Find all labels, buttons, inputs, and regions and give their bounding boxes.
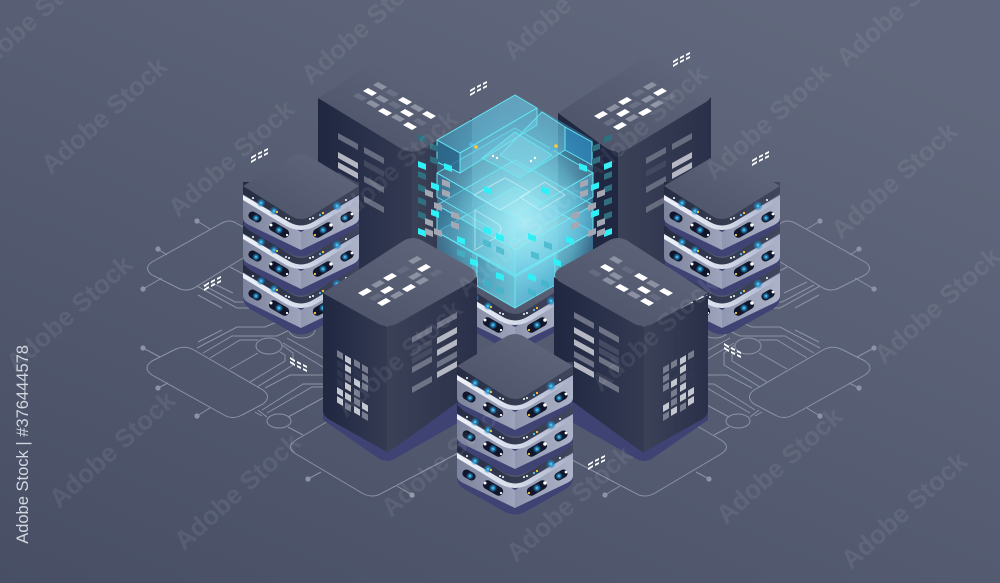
stock watermark pattern: Adobe Stock xyxy=(35,51,173,180)
stock watermark pattern: Adobe Stock xyxy=(162,94,300,223)
tower floor shadow xyxy=(323,385,477,461)
stock watermark pattern: Adobe Stock xyxy=(450,174,588,303)
front-right server tower xyxy=(554,238,708,461)
front server stack xyxy=(457,334,573,514)
small data tags xyxy=(204,52,769,470)
stock watermark pattern: Adobe Stock xyxy=(835,446,973,575)
circuit board lines: left xyxy=(140,218,460,498)
stock watermark pattern: Adobe Stock xyxy=(43,385,181,514)
stock watermark pattern: Adobe Stock xyxy=(330,294,468,423)
stock watermark pattern: Adobe Stock xyxy=(698,57,836,186)
tower floor shadow xyxy=(554,385,708,461)
cube: lower plate xyxy=(437,187,593,277)
cube: amber and white nodes xyxy=(469,142,558,162)
cube: translucent body xyxy=(437,95,593,308)
holographic data cube xyxy=(437,95,595,308)
center back server stack xyxy=(457,249,573,352)
stock watermark pattern: Adobe Stock xyxy=(575,59,713,188)
stock watermark pattern: Adobe Stock xyxy=(585,269,723,398)
right server stack xyxy=(664,154,780,334)
stock watermark pattern: Adobe Stock xyxy=(0,249,138,378)
cube: bright squares xyxy=(444,163,587,282)
cube: top box xyxy=(437,95,592,178)
cube: soft squares xyxy=(457,239,552,297)
pixel squares on tower sides: right xyxy=(571,134,612,237)
cube: second layer xyxy=(437,128,593,242)
cube: bottom block xyxy=(477,252,555,308)
stock watermark pattern: Adobe Stock xyxy=(168,427,306,556)
stock watermark pattern: Adobe Stock xyxy=(825,116,963,245)
cube: central glow xyxy=(455,152,595,292)
stock watermark pattern: Adobe Stock xyxy=(500,439,638,568)
stock watermark pattern: Adobe Stock xyxy=(325,104,463,233)
stock watermark pattern: Adobe Stock xyxy=(710,401,848,530)
back-right server tower xyxy=(558,57,711,340)
front-left server tower xyxy=(323,238,477,461)
cube: third layer xyxy=(437,160,593,275)
pixel squares on tower sides: left xyxy=(418,134,459,237)
left server stack xyxy=(243,154,359,334)
stock watermark pattern: Adobe Stock xyxy=(375,394,513,523)
stock id vertical text: Adobe Stock | #376444578 xyxy=(14,345,32,544)
cube: inner wireframe lines xyxy=(474,178,565,250)
circuit board lines: right xyxy=(557,218,877,498)
back-left server tower xyxy=(318,64,472,340)
